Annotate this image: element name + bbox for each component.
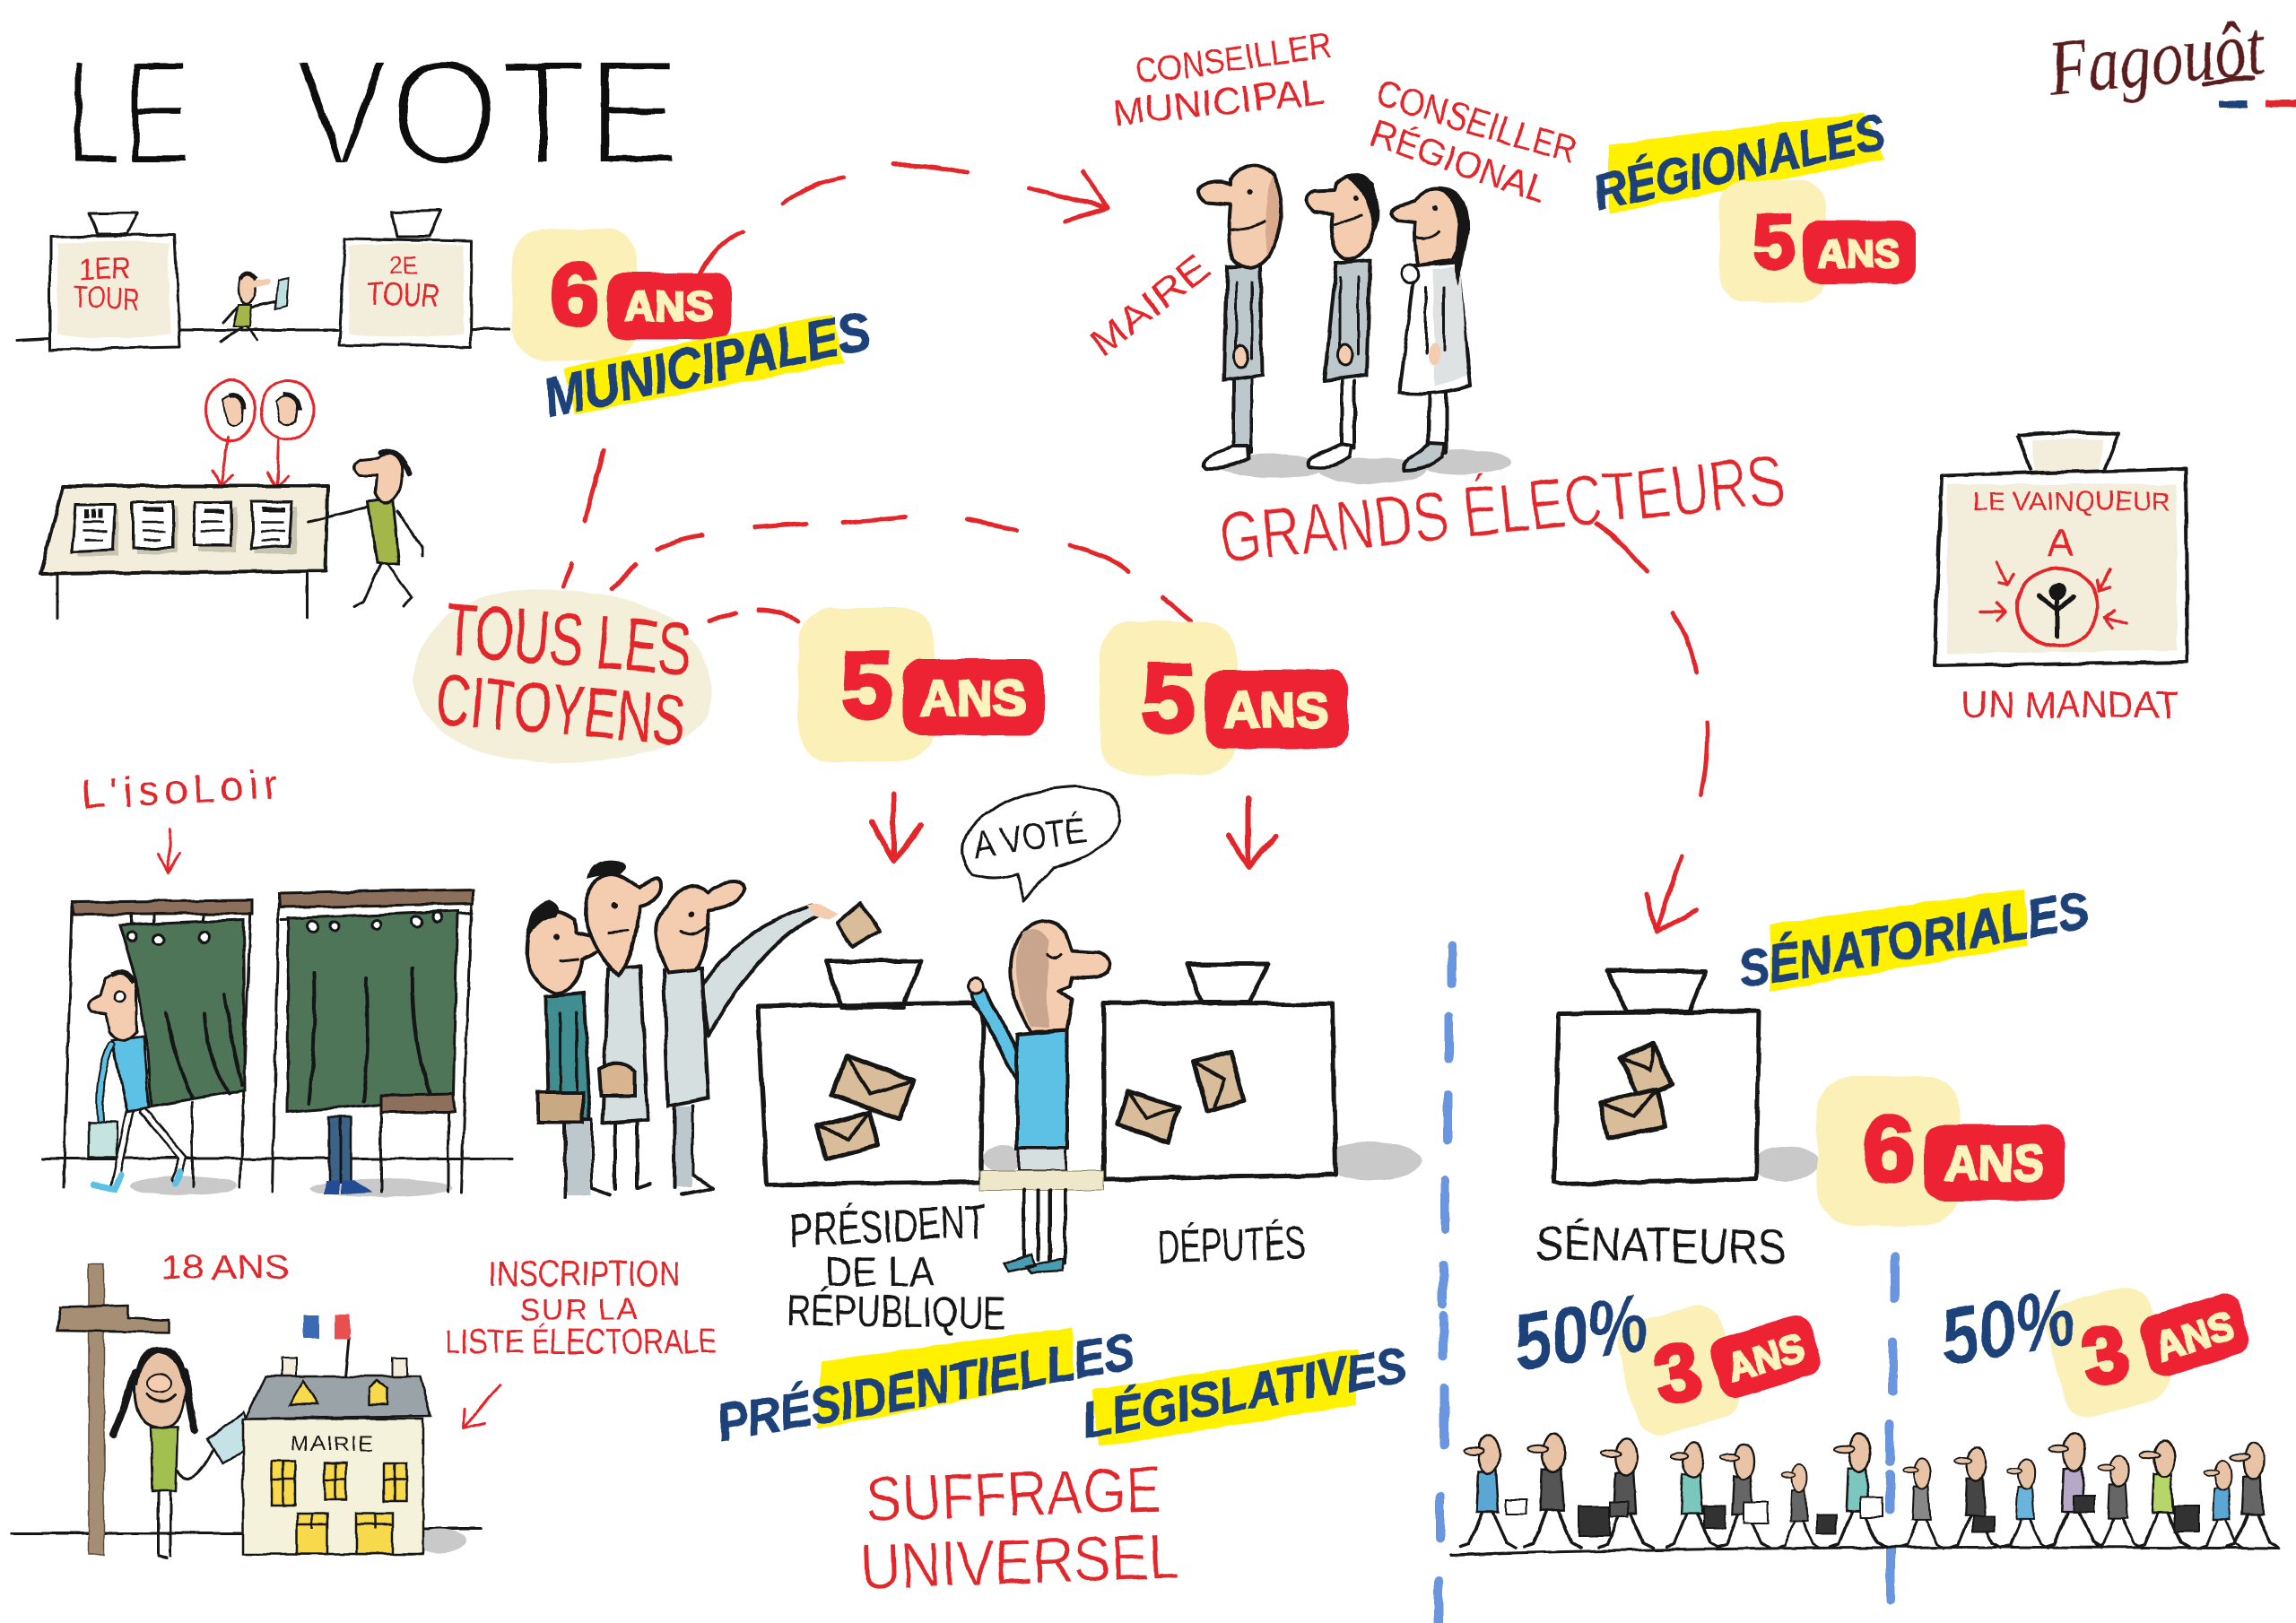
labels: elected officials: MAIRE [1082, 246, 1217, 365]
voter who has voted [969, 922, 1110, 1273]
title: VOTE [294, 28, 682, 196]
voter at table [309, 452, 422, 607]
tag: régionales 5 ans: 5 [1753, 199, 1795, 283]
title [65, 28, 682, 196]
panel: winner gets a mandate: UN MANDAT [1961, 683, 2179, 725]
tag: municipales 6 ans: 6 [551, 245, 599, 343]
label: président de la république [787, 1195, 1005, 1339]
tag: senators 6 ans: ANS [1944, 1134, 2045, 1191]
blue dashed dividers [1439, 945, 1895, 1623]
building: mairie: MAIRIE [291, 1432, 373, 1456]
shadows under ballot boxes [983, 1142, 1819, 1182]
figure: mayor woman [1392, 187, 1471, 471]
tag: régionales 5 ans [1719, 180, 1916, 302]
box: first round [50, 213, 180, 350]
label: président de la république: DE LA [825, 1248, 935, 1295]
walking crowd of elected senators [1450, 1433, 2280, 1555]
panel: winner gets a mandate: A [2048, 521, 2074, 565]
tag: president 5 ans: 5 [841, 633, 893, 738]
stat: 50% 3 ans left [1507, 1278, 1825, 1440]
ballot box: senators: SÉNATEURS [1535, 1217, 1787, 1274]
to deputies [611, 517, 1191, 621]
labels: elected officials: CONSEILLER [1133, 26, 1334, 92]
envelopes [832, 1056, 913, 1119]
figure: mayor [1198, 165, 1282, 469]
title: LE [65, 28, 192, 196]
tag: municipales 6 ans [512, 229, 731, 360]
table strip [980, 1171, 1104, 1190]
tag: deputies 5 ans [1100, 621, 1348, 775]
box: second round: TOUR [367, 277, 440, 313]
stat: 50% 3 ans right: 3 [2075, 1307, 2135, 1404]
label: l'isoloir with arrow [81, 760, 278, 872]
stat: 50% 3 ans left: 3 [1648, 1325, 1708, 1422]
box: first round: 1ER [79, 251, 131, 287]
label: suffrage universel: UNIVERSEL [858, 1521, 1181, 1603]
figures: mayor and councillors [1198, 165, 1511, 483]
tag: régionales 5 ans: ANS [1818, 232, 1900, 276]
callout: inscription: SUR LA [520, 1293, 638, 1327]
signpost [57, 1264, 169, 1554]
flag [304, 1315, 350, 1339]
building: mairie [243, 1315, 466, 1554]
woman with envelope [113, 1348, 257, 1558]
candidate heads [206, 380, 313, 488]
candidate list table [40, 380, 327, 618]
heading: régionales: RÉGIONALES [1588, 103, 1890, 221]
tag: municipales 6 ans: ANS [624, 282, 714, 329]
to senators [1596, 523, 1707, 933]
labels: elected officials [1082, 26, 1583, 365]
voter 1 [526, 899, 610, 1197]
municipal link [563, 450, 604, 586]
booth 2 [273, 890, 473, 1194]
tag: president 5 ans [798, 608, 1044, 761]
person leaving booth [89, 971, 183, 1189]
ballot box: deputies: DÉPUTÉS [1156, 1217, 1307, 1274]
voters in line [526, 860, 879, 1197]
arrow to deputies box [1229, 798, 1275, 867]
tag: senators 6 ans [1817, 1076, 2065, 1226]
ballot boxes: two rounds [17, 211, 509, 350]
booth 1 [64, 900, 252, 1189]
heading: législatives: LÉGISLATIVES [1079, 1336, 1411, 1448]
label: l'isoloir with arrow: L'isoLoir [81, 760, 278, 818]
labels: elected officials: RÉGIONAL [1365, 112, 1552, 212]
tag: deputies 5 ans: ANS [1223, 681, 1329, 738]
panel: all citizens: TOUS LES [442, 586, 695, 692]
small voter with ballot [221, 273, 289, 342]
speech bubble: a voté: A VOTÉ [970, 808, 1089, 866]
ballot papers [72, 502, 297, 556]
tag: senators 6 ans: 6 [1863, 1097, 1915, 1202]
label: suffrage universel [858, 1454, 1181, 1603]
stat: 50% 3 ans right [1934, 1272, 2254, 1422]
envelopes [1117, 1091, 1179, 1141]
panel: all citizens [412, 586, 711, 762]
heading: sénatoriales: SÉNATORIALES [1734, 881, 2093, 1000]
callout: inscription: LISTE ÉLECTORALE [445, 1323, 718, 1361]
arrow to president box [871, 794, 921, 861]
winner in circle with arrows [1980, 563, 2127, 646]
stat: 50% 3 ans left: ANS [1722, 1325, 1811, 1391]
voter 2 [585, 860, 661, 1188]
panel: registration at 18: 18 ANS [161, 1249, 289, 1287]
ballot box: president [758, 961, 1005, 1339]
legs behind curtain [324, 1117, 372, 1194]
box: second round [339, 211, 472, 347]
panel: winner gets a mandate: LE VAINQUEUR [1972, 487, 2171, 516]
callout: inscription: INSCRIPTION [489, 1254, 681, 1294]
label: président de la république: PRÉSIDENT [788, 1195, 987, 1258]
panel: all citizens: CITOYENS [432, 659, 689, 760]
stat: 50% 3 ans right: 50% [1934, 1272, 2082, 1384]
ballot box: senators [1535, 971, 1787, 1274]
windows and doors [272, 1462, 406, 1554]
panel: registration at 18 [12, 1249, 718, 1558]
heading: municipales: MUNICIPALES [538, 299, 875, 430]
stat: 50% 3 ans left: 50% [1507, 1278, 1655, 1389]
briefcases [1507, 1496, 2198, 1535]
panel: winner gets a mandate [1935, 432, 2187, 725]
stat: 50% 3 ans right: ANS [2151, 1304, 2239, 1369]
voting booths [43, 890, 512, 1197]
tag: president 5 ans: ANS [920, 670, 1026, 726]
to president [709, 610, 798, 621]
callout: inscription [445, 1254, 718, 1428]
dashed arrows from citizens [563, 164, 1707, 933]
ballot box: deputies [1104, 964, 1335, 1274]
envelopes [1621, 1043, 1672, 1099]
speech bubble: a voté [963, 786, 1121, 900]
label: suffrage universel: SUFFRAGE [865, 1454, 1162, 1536]
tag: deputies 5 ans: 5 [1142, 643, 1196, 751]
voter 3 [656, 881, 879, 1194]
to municipal councillors [700, 164, 1108, 273]
label: grands électeurs: GRANDS ÉLECTEURS [1215, 439, 1787, 578]
label: président de la république: RÉPUBLIQUE [787, 1285, 1005, 1339]
heading: présidentielles: PRÉSIDENTIELLES [712, 1322, 1140, 1453]
figure: regional councillor [1306, 173, 1379, 467]
labels: elected officials: MUNICIPAL [1110, 70, 1326, 134]
labels: elected officials: CONSEILLER [1371, 71, 1583, 172]
box: first round: TOUR [73, 280, 141, 317]
box: second round: 2E [389, 251, 418, 281]
